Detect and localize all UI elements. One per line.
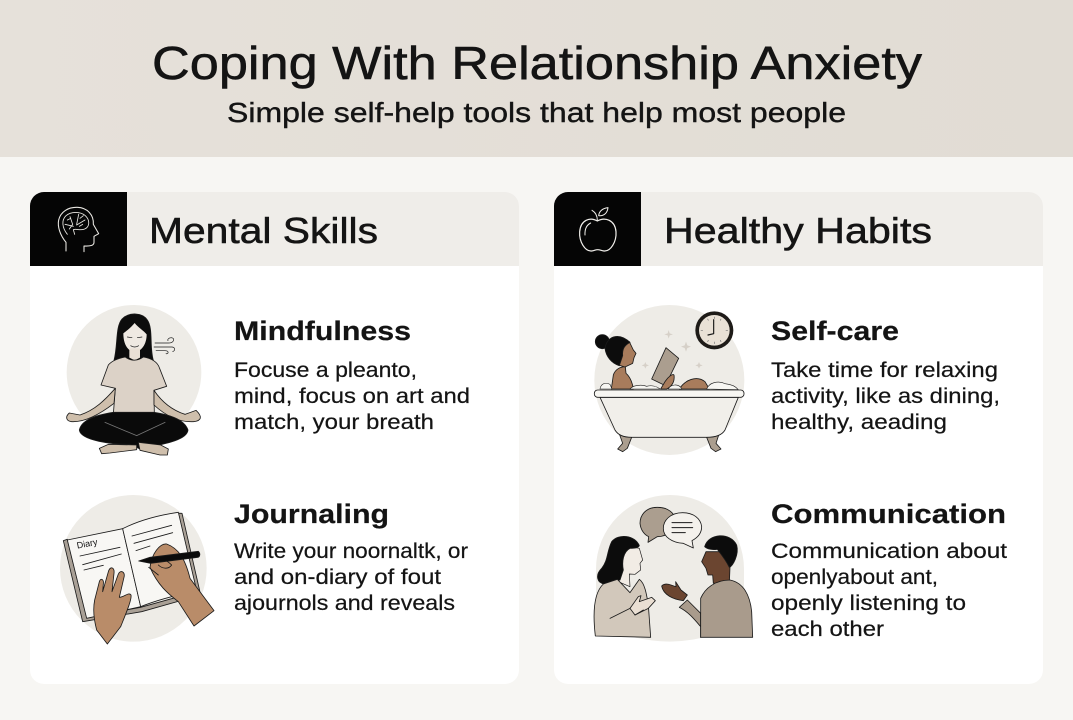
description: self-care: activity, like as dining, (771, 384, 1000, 408)
panel: mental skills (30, 192, 519, 684)
item: mindfulness (67, 305, 470, 455)
illustration: diary and hands: Diary (76, 537, 99, 551)
description: journaling: Write your noornaltk, or (234, 539, 468, 563)
description: journaling: ajournols and reveals (234, 591, 455, 615)
description: self-care: healthy, aeading (771, 410, 947, 434)
description: mindfulness: match, your breath (234, 410, 434, 434)
panel: healthy habits (554, 192, 1043, 684)
description: communication: openlyabout ant, (771, 565, 938, 589)
description: journaling: and on-diary of fout (234, 565, 441, 589)
description: communication (771, 539, 1007, 641)
illustration: woman reading in bath (594, 305, 744, 455)
description: communication: openly listening to (771, 591, 966, 615)
description: journaling (234, 539, 468, 615)
panel heading: healthy habits: Healthy Habits (664, 210, 932, 251)
panel heading: healthy habits (554, 192, 1043, 266)
item: communication (594, 495, 1007, 642)
description: communication: Communication about (771, 539, 1007, 563)
header banner (0, 0, 1073, 157)
heading: communication: Communication (771, 499, 1006, 529)
description: mindfulness: mind, focus on art and (234, 384, 470, 408)
description: self-care (771, 358, 1000, 434)
illustration: meditating woman (67, 305, 201, 455)
icon: brain in head (58, 207, 99, 252)
description: mindfulness: Focuse a pleanto, (234, 358, 417, 382)
subtitle: Simple self-help tools that help most people (227, 97, 846, 128)
panel heading: mental skills (30, 192, 519, 266)
description: communication: each other (771, 617, 884, 641)
description: self-care: Take time for relaxing (771, 358, 998, 382)
illustration: diary and hands (60, 495, 214, 644)
item: journaling (60, 495, 468, 644)
heading: self-care: Self-care (771, 316, 899, 346)
panel heading: mental skills: Mental Skills (149, 210, 378, 251)
item: self-care (594, 305, 1000, 455)
illustration: two people talking (594, 495, 753, 642)
description: mindfulness (234, 358, 470, 434)
icon: apple (580, 208, 616, 251)
heading: journaling: Journaling (234, 499, 389, 529)
title: Coping With Relationship Anxiety (152, 37, 922, 89)
heading: mindfulness: Mindfulness (234, 316, 411, 346)
